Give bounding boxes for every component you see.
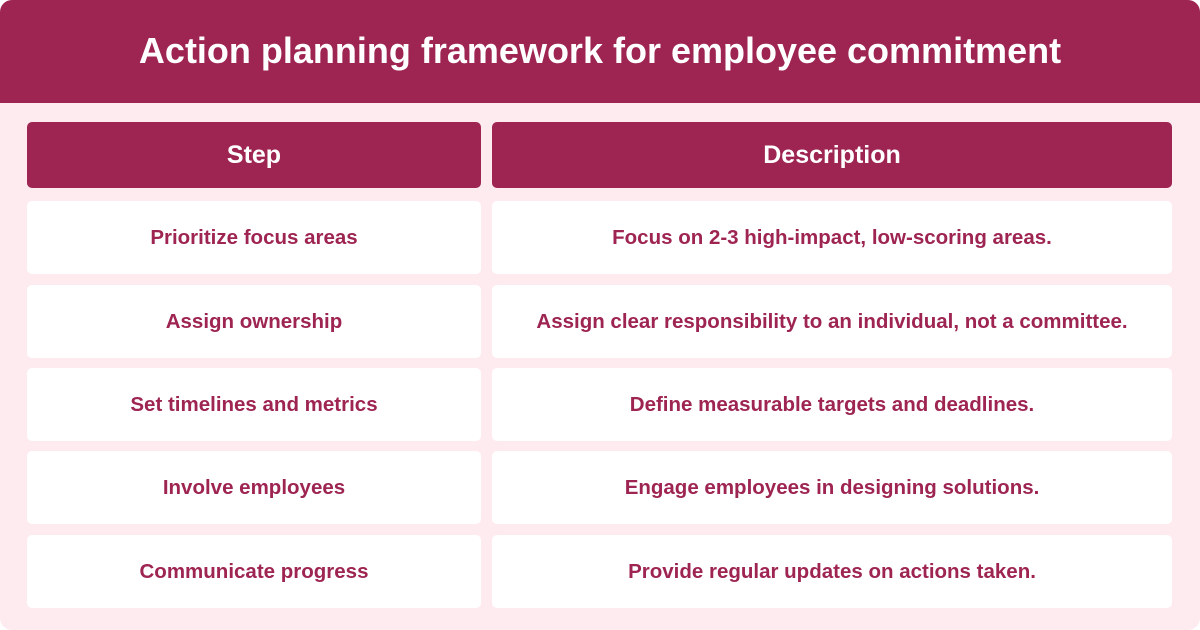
row 3 description	[492, 368, 1172, 441]
row 4 description	[492, 451, 1172, 524]
row 1 step	[27, 201, 481, 274]
row 5 description: Provide regular updates on actions taken.	[628, 560, 1036, 582]
row 3 step	[27, 368, 481, 441]
row 2 description: Assign clear responsibility to an individual, not a committee.	[536, 310, 1128, 332]
row 4 step	[27, 451, 481, 524]
row 5 step	[27, 535, 481, 608]
title: Action planning framework for employee commitment	[139, 30, 1061, 70]
row 5 step: Communicate progress	[140, 560, 368, 582]
row 5 description	[492, 535, 1172, 608]
row 4 step: Involve employees	[163, 476, 345, 498]
row 1 description	[492, 201, 1172, 274]
row 2 step	[27, 285, 481, 358]
row 2 description	[492, 285, 1172, 358]
table header: description	[492, 122, 1172, 188]
table header: step: Step	[227, 140, 281, 168]
table header: description: Description	[763, 140, 901, 168]
row 2 step: Assign ownership	[166, 310, 342, 332]
row 3 description: Define measurable targets and deadlines.	[630, 392, 1034, 416]
table header: step	[27, 122, 481, 188]
row 4 description: Engage employees in designing solutions.	[625, 476, 1039, 498]
title	[0, 0, 1200, 103]
row 1 step: Prioritize focus areas	[150, 226, 358, 248]
row 3 step: Set timelines and metrics	[130, 392, 378, 416]
row 1 description: Focus on 2-3 high-impact, low-scoring areas.	[612, 226, 1052, 248]
